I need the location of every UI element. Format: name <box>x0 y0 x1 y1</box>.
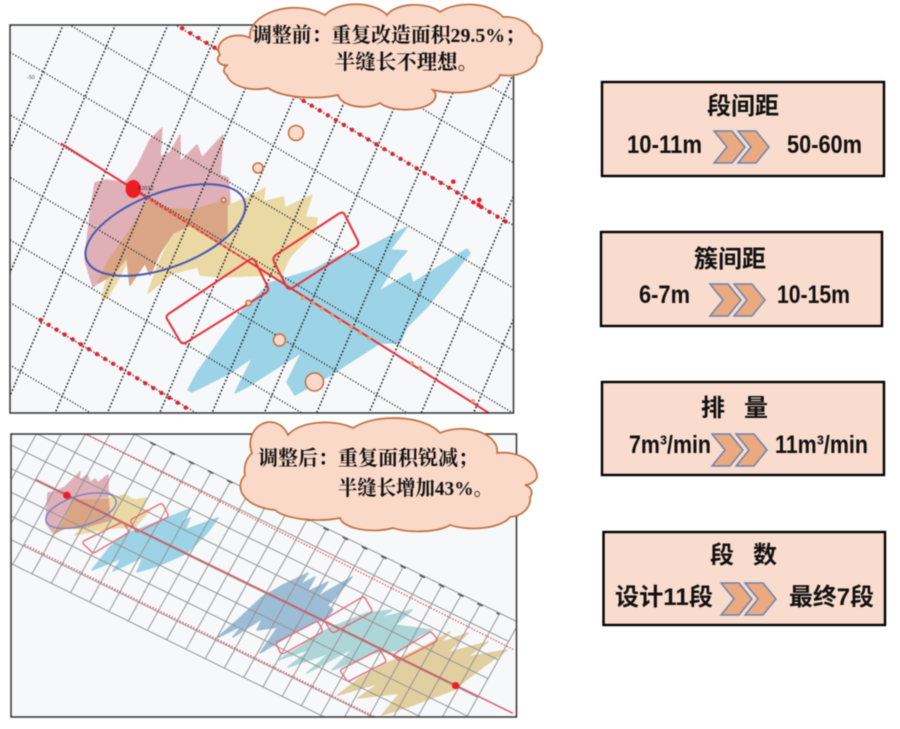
red outlined stage boxes <box>83 504 437 681</box>
repeated stimulation ellipse <box>44 492 118 530</box>
callout: after adjustment cloud: 半缝长增加43%。 <box>338 477 493 500</box>
value after: 50-60m <box>787 131 862 159</box>
heading: stage count: 段 <box>710 542 734 569</box>
panel: cluster spacing <box>601 232 882 326</box>
dotted survey grid <box>10 25 514 413</box>
heading: pump rate: 量 <box>744 395 768 422</box>
value after: 最终7段 <box>789 583 874 611</box>
repeated stimulation ellipse <box>84 182 247 278</box>
callout: after adjustment cloud <box>240 418 537 531</box>
red outlined stage box 2 <box>273 213 358 289</box>
red dotted well row upper <box>182 28 511 225</box>
fracture zone: blue <box>92 509 218 572</box>
callout: before adjustment cloud: 半缝长不理想。 <box>335 51 478 74</box>
horizontal well trajectory <box>61 143 489 413</box>
value before: 7m³/min <box>629 431 711 459</box>
icon: double chevron <box>714 131 769 163</box>
heading: cluster spacing: 簇间距 <box>694 246 766 273</box>
perforation points <box>301 296 475 403</box>
panel: after adjustment map <box>9 432 518 719</box>
well head marker <box>126 180 141 198</box>
survey grid <box>11 434 516 717</box>
well markers <box>63 492 459 689</box>
axis label: -50 <box>27 75 35 81</box>
callout: after adjustment cloud: 调整后：重复面积锐减； <box>258 447 478 470</box>
value after: 10-15m <box>777 281 850 309</box>
perforated segment near heel <box>148 199 248 262</box>
fracture zone: tan <box>52 495 150 535</box>
fracture zone: pink <box>85 128 230 287</box>
red dotted well row lower <box>40 320 192 412</box>
value before: 设计11段 <box>615 583 713 611</box>
microseismic event circles <box>221 126 324 391</box>
panel: stage count <box>604 532 885 625</box>
value before: 10-11m <box>627 131 702 159</box>
fracture zone: sand <box>338 632 507 715</box>
heading: pump rate: 排 <box>701 395 725 422</box>
red outlined stage box 1 <box>167 259 268 343</box>
fracture zone: blue <box>188 227 470 395</box>
fracture zone: teal <box>278 610 432 673</box>
value after: 11m³/min <box>775 431 868 459</box>
fracture overlap <box>98 198 227 285</box>
heading: stage count: 数 <box>753 542 777 569</box>
horizontal well trajectory <box>35 479 513 713</box>
panel: stage spacing <box>602 82 884 176</box>
callout: before adjustment cloud: 调整前：重复改造面积29.5%； <box>252 24 525 47</box>
callout: before adjustment cloud <box>218 4 542 110</box>
axis tick marks <box>150 442 500 614</box>
panel: before adjustment map <box>8 23 516 415</box>
red dashed well row upper <box>88 435 513 649</box>
fracture zone: dark blue <box>217 573 352 653</box>
well name label: F2012 <box>138 186 154 192</box>
fracture zone: tan <box>102 188 317 300</box>
icon: double chevron <box>710 284 765 316</box>
value before: 6-7m <box>639 281 690 309</box>
fracture overlap <box>55 499 110 533</box>
fracture zone: pink <box>46 472 110 533</box>
icon: double chevron <box>721 583 776 615</box>
panel: pump rate <box>602 382 884 475</box>
red dashed well row lower <box>25 545 375 717</box>
heading: stage spacing: 段间距 <box>707 92 779 120</box>
icon: double chevron <box>712 434 767 466</box>
